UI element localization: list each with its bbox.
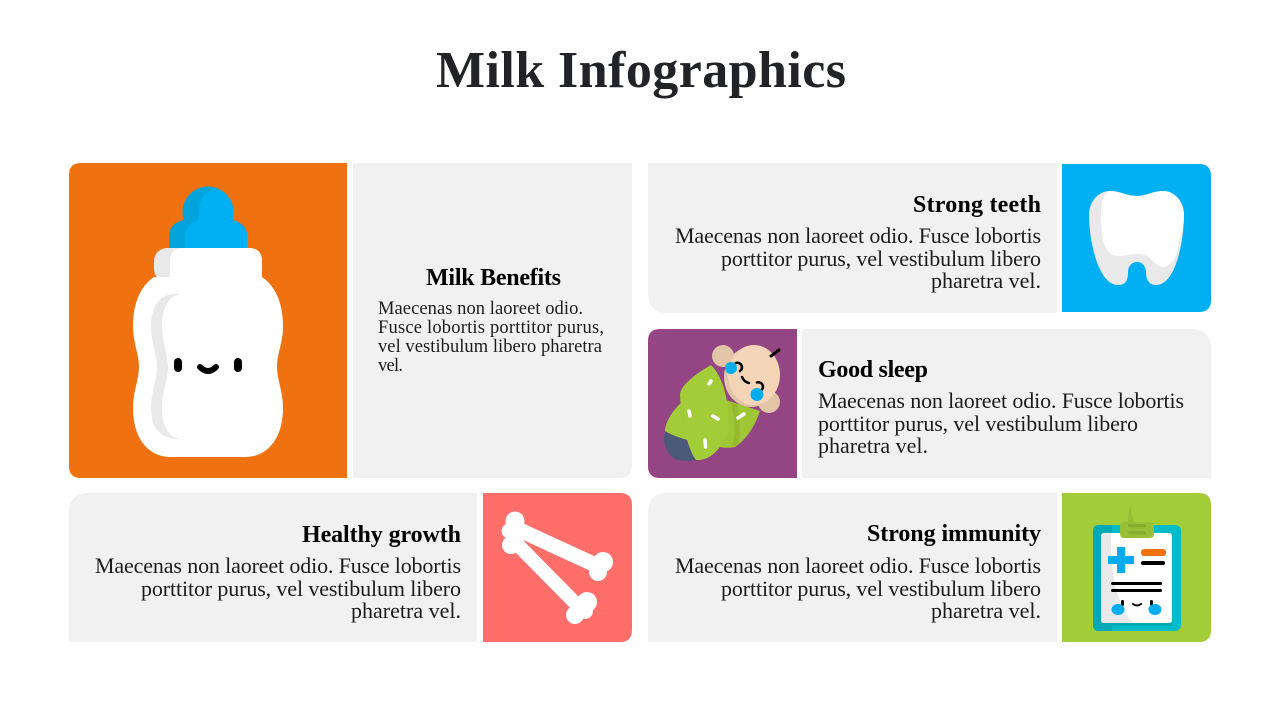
- heading: milk benefits: Milk Benefits: [426, 265, 561, 291]
- icon: tooth: [1089, 191, 1184, 285]
- title: Milk Infographics: [436, 42, 846, 99]
- text block: milk benefits: vel vestibulum libero pharetra: [378, 337, 602, 357]
- text block: good sleep: [818, 388, 1184, 458]
- icon: swaddled baby: [664, 345, 780, 461]
- text block: healthy growth: pharetra vel.: [351, 598, 461, 623]
- text block: milk benefits: Fusce lobortis porttitor purus,: [378, 318, 604, 338]
- text block: strong immunity: [675, 553, 1041, 623]
- text block: strong teeth: Maecenas non laoreet odio. Fusce lobortis: [675, 223, 1041, 248]
- icon: milk bottle: [133, 186, 283, 457]
- gray text card: [353, 163, 632, 478]
- heading: strong teeth: Strong teeth: [913, 192, 1041, 218]
- heading: strong immunity: Strong immunity: [867, 521, 1041, 547]
- text block: milk benefits: [378, 299, 604, 376]
- orange bottle tile: [69, 163, 347, 478]
- gray text card: [802, 329, 1211, 478]
- text block: healthy growth: Maecenas non laoreet odio. Fusce lobortis: [95, 553, 461, 578]
- text block: milk benefits: vel.: [378, 356, 403, 376]
- panel: strong immunity: [648, 493, 1211, 642]
- red tile: [483, 493, 632, 642]
- text block: good sleep: Maecenas non laoreet odio. Fusce lobortis: [818, 388, 1184, 413]
- text block: strong teeth: pharetra vel.: [931, 268, 1041, 293]
- purple tile: [648, 329, 797, 478]
- panel: good sleep: [648, 329, 1211, 478]
- heading: good sleep: Good sleep: [818, 357, 928, 383]
- icon: medical clipboard: [1093, 506, 1181, 631]
- icon: bones: [502, 512, 613, 624]
- text block: healthy growth: [95, 553, 461, 623]
- heading: healthy growth: Healthy growth: [302, 522, 461, 548]
- text block: milk benefits: Maecenas non laoreet odio.: [378, 299, 583, 319]
- panel: healthy growth: [69, 493, 632, 642]
- gray text card: [648, 163, 1057, 313]
- text block: strong teeth: porttitor purus, vel vestibulum libero: [721, 246, 1041, 271]
- text block: good sleep: pharetra vel.: [818, 433, 928, 458]
- text block: strong immunity: Maecenas non laoreet odio. Fusce lobortis: [675, 553, 1041, 578]
- green tile: [1062, 493, 1211, 642]
- text block: healthy growth: porttitor purus, vel vestibulum libero: [141, 576, 461, 601]
- blue tile: [1062, 164, 1211, 312]
- panel: strong teeth: [648, 163, 1211, 313]
- text block: good sleep: porttitor purus, vel vestibulum libero: [818, 411, 1138, 436]
- gray text card: [648, 493, 1057, 642]
- panel: milk benefits: [69, 163, 632, 478]
- text block: strong teeth: [675, 223, 1041, 293]
- text block: strong immunity: pharetra vel.: [931, 598, 1041, 623]
- gray text card: [69, 493, 477, 642]
- text block: strong immunity: porttitor purus, vel vestibulum libero: [721, 576, 1041, 601]
